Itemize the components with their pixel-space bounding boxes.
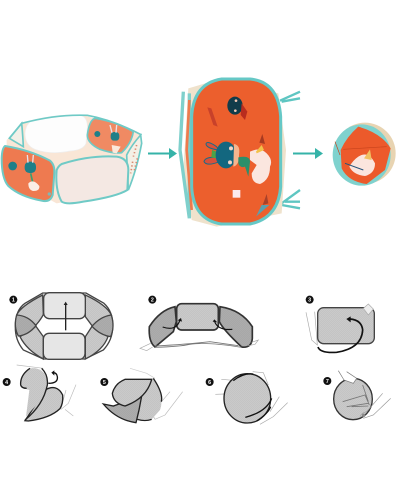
pen cream base [7, 115, 142, 203]
panel: back right orange [87, 118, 133, 153]
arrow: pen to folded [148, 148, 177, 159]
lower flap [103, 396, 142, 423]
panel rectangle [318, 308, 374, 344]
round fold [112, 379, 152, 406]
bottom hand [360, 393, 391, 418]
cone [364, 149, 372, 160]
panel: front white mesh [56, 156, 128, 203]
step 1: open pen diagram [9, 293, 113, 359]
up arrow [64, 302, 68, 330]
hand lines [215, 372, 288, 424]
outer hexagon [15, 293, 113, 359]
panel: right pattern [127, 135, 142, 190]
pen top rim [9, 115, 142, 138]
number badge 1: 1 [12, 298, 15, 304]
step 3: rectangle diagram [306, 296, 374, 352]
step 2: sides folded diagram [140, 296, 258, 351]
panel: back left pattern [9, 123, 23, 147]
upper loop [20, 368, 47, 417]
pattern dots [131, 145, 137, 173]
hand left [306, 312, 317, 345]
number badge 2: 2 [151, 298, 154, 304]
arrow: folded to ball [293, 148, 323, 159]
back layers [183, 80, 286, 227]
curved arrow [318, 316, 363, 352]
character: small rocket [207, 107, 218, 127]
panel: orange wrapped [341, 127, 391, 184]
number badge 6: 6 [208, 380, 211, 386]
character: bunny [204, 142, 250, 177]
twist arrow [48, 370, 57, 383]
bottom panel [43, 333, 85, 359]
number badge 5: 5 [103, 380, 106, 386]
character: front left bunny [8, 155, 51, 196]
character: yellow cone [256, 145, 264, 153]
right wing [219, 307, 252, 347]
character: small bottom rocket [256, 194, 269, 217]
hand top right [363, 304, 373, 315]
step 4: first twist diagram [3, 365, 76, 421]
panel: front left orange [2, 146, 54, 201]
panel: orange front [192, 79, 281, 224]
step 7: finished ball diagram [323, 371, 391, 420]
disc [224, 374, 271, 423]
number badge 4: 4 [5, 380, 8, 386]
photo: open hexagonal play pen [2, 115, 142, 203]
panel: back white mesh [25, 115, 87, 153]
crease lines [343, 385, 369, 407]
side panels [17, 295, 43, 325]
hand [17, 365, 76, 416]
photo: flattened pen [180, 79, 300, 227]
straps [280, 92, 300, 208]
number badge 3: 3 [308, 298, 311, 304]
centre panel [177, 304, 218, 330]
step 5: second twist diagram [100, 368, 183, 423]
beige outer [334, 123, 396, 184]
top panel [44, 293, 85, 319]
folds [335, 142, 387, 155]
coil edges [233, 374, 272, 421]
character: back right bunny [94, 125, 121, 153]
tie [345, 163, 363, 170]
label patch [233, 190, 240, 198]
fold arrows [163, 320, 180, 328]
ball [334, 378, 372, 420]
main body [137, 378, 161, 420]
character: top bird [227, 97, 247, 120]
top hand [338, 371, 357, 383]
photo: folded ball [333, 123, 396, 186]
cloud [349, 154, 375, 176]
hand [152, 392, 183, 419]
character: white cloud [250, 150, 271, 184]
lower loop [25, 388, 63, 421]
step 6: coil diagram [206, 372, 288, 424]
number badge 7: 7 [326, 379, 329, 385]
left wing [149, 307, 176, 347]
lower edge and hand [155, 342, 242, 347]
teal rim [333, 124, 391, 186]
